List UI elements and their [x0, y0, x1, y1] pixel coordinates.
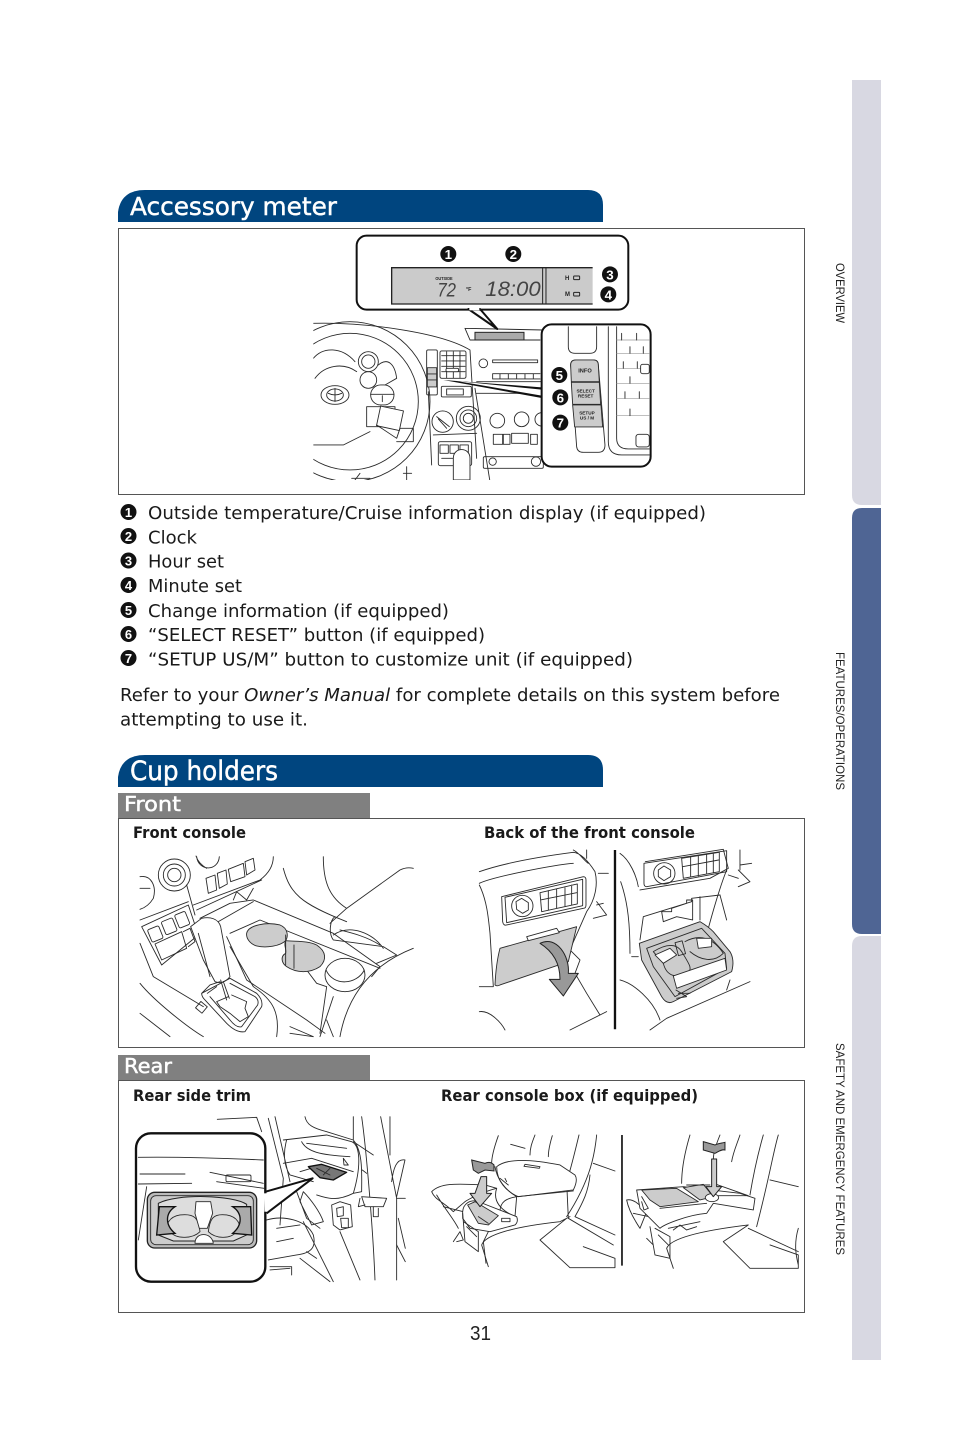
item 4: Minute set	[148, 576, 242, 597]
illustration: back of front console	[479, 849, 752, 1030]
illustration: front console	[140, 856, 413, 1037]
heading: cup holders: Cup holders	[130, 756, 278, 787]
inset: control buttons: INFO	[578, 369, 592, 375]
LCD display: 18:00	[485, 277, 541, 301]
subheading: front: Front	[124, 792, 181, 816]
page number: 31	[470, 1323, 491, 1345]
tab: overview	[852, 80, 881, 505]
note text: Refer to your Owner’s Manual for complete details on this system before	[120, 685, 780, 706]
item 5: Change information (if equipped)	[148, 601, 449, 622]
item 6: “SELECT RESET” button (if equipped)	[148, 625, 485, 646]
note text: attempting to use it.	[120, 710, 308, 730]
item 1: 1	[125, 505, 132, 520]
item 5: 5	[125, 603, 132, 618]
item 2: 2	[125, 529, 132, 544]
item 1: Outside temperature/Cruise information display (if equipped)	[148, 503, 706, 524]
item 2	[120, 527, 198, 548]
item 7: 7	[125, 651, 132, 666]
leader lines to inset	[443, 380, 542, 398]
label: back of the front console: Back of the front console	[484, 823, 695, 842]
LCD display: H	[565, 276, 569, 282]
tab label: features: FEATURES/OPERATIONS	[833, 652, 847, 790]
tab label: overview: OVERVIEW	[833, 263, 847, 324]
centre stack	[440, 351, 466, 378]
dashboard illustration	[313, 234, 652, 480]
tab: features and operations	[852, 508, 881, 934]
item 6: 6	[125, 627, 132, 642]
dash top	[313, 323, 543, 458]
callout tail and box	[468, 309, 497, 329]
side tabs	[833, 80, 881, 1360]
inset: control buttons: SETUP	[579, 410, 595, 415]
tab label: safety: SAFETY AND EMERGENCY FEATURES	[833, 1043, 847, 1255]
heading: accessory meter: Accessory meter	[130, 192, 338, 221]
item 3: Hour set	[148, 552, 224, 573]
number badges: 3	[606, 267, 614, 282]
tab: safety and emergency	[852, 936, 881, 1360]
label: front console: Front console	[133, 823, 246, 842]
panel: accessory meter diagram	[118, 228, 804, 494]
numbered list	[120, 503, 706, 671]
number badges: 2	[510, 247, 517, 262]
LCD display: M	[565, 292, 570, 298]
item 2: Clock	[148, 527, 198, 548]
number badges: 5	[556, 368, 564, 383]
number badges: 6	[557, 390, 564, 405]
label: rear side trim: Rear side trim	[133, 1086, 251, 1105]
LCD display: 72	[437, 280, 456, 301]
LCD display: OUTSIDE	[435, 276, 453, 281]
number badges	[440, 246, 618, 431]
page	[118, 80, 881, 1360]
inset: control buttons: US / M	[580, 415, 594, 420]
inset: control buttons	[542, 324, 651, 467]
item 4: 4	[125, 578, 133, 593]
LCD display	[392, 268, 593, 304]
inset: control buttons: SELECT	[576, 389, 595, 394]
subheading: rear: Rear	[124, 1054, 173, 1078]
LCD display: °F	[466, 287, 472, 293]
illustration: rear console box, closed	[432, 1135, 798, 1268]
number badges: 7	[557, 416, 564, 431]
heading: cup holders	[118, 755, 603, 787]
heading: accessory meter	[118, 190, 603, 222]
number badges: 4	[605, 287, 613, 302]
inset: control buttons: RESET	[578, 393, 594, 398]
subheading: front	[118, 792, 370, 818]
steering wheel	[313, 321, 430, 480]
panel: rear cup holders	[118, 1080, 804, 1312]
item 3: 3	[125, 554, 132, 568]
number badges: 1	[445, 247, 453, 262]
illustration: rear side trim	[136, 1117, 405, 1282]
subheading: rear	[118, 1054, 370, 1080]
item 7: “SETUP US/M” button to customize unit (if equipped)	[148, 650, 633, 671]
panel: front cup holders	[118, 818, 804, 1048]
note text	[120, 685, 780, 730]
label: rear console box: Rear console box (if equipped)	[441, 1086, 698, 1105]
